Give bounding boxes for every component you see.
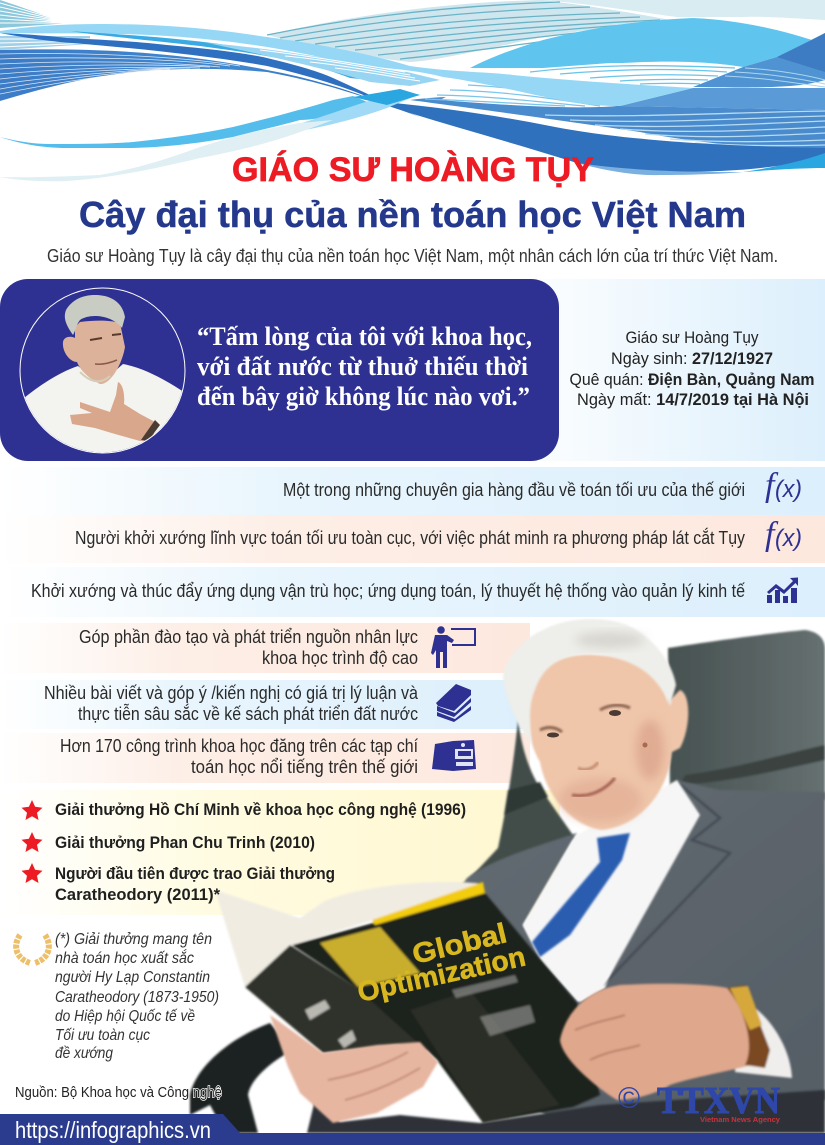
- footnote: đề xướng: [55, 1045, 113, 1062]
- quote text: với đất nước từ thuở thiếu thời: [197, 352, 528, 381]
- icon: open journal: [432, 740, 476, 771]
- footer url: https://infographics.vn: [15, 1117, 211, 1143]
- band: global optimisation: Người khởi xướng lĩnh vực toán tối ưu toàn cục, với việc phát minh ra phương pháp lát cắt Tụy: [75, 527, 745, 548]
- icon: laurel: [16, 935, 49, 963]
- band: operations research: Khởi xướng và thúc đẩy ứng dụng vận trù học; ứng dụng toán, lý thuyết hệ thống vào quản lý kinh tế: [31, 581, 745, 601]
- band: expert: Một trong những chuyên gia hàng đầu về toán tối ưu của thế giới: [283, 480, 745, 500]
- shirt: [523, 780, 700, 1002]
- agency logo: [618, 1080, 780, 1124]
- band: writing: Nhiều bài viết và góp ý /kiến nghị có giá trị lý luận và: [44, 683, 419, 703]
- bio name: Giáo sư Hoàng Tụy: [626, 328, 759, 347]
- tagline: Vietnam News Agency: [700, 1117, 780, 1124]
- footnote: do Hiệp hội Quốc tế về: [55, 1008, 195, 1025]
- book title text: Global: [409, 917, 510, 970]
- icon: f(x) second: f: [765, 516, 779, 553]
- large photo of professor with book: [190, 619, 825, 1133]
- award 3: [22, 863, 335, 904]
- header wave graphic: [0, 0, 825, 181]
- band: global optimisation: [0, 515, 825, 563]
- award 2: Giải thưởng Phan Chu Trinh (2010): [55, 834, 315, 852]
- quote text: đến bây giờ không lúc nào vơi.”: [197, 382, 530, 411]
- panel: biography: [500, 279, 825, 461]
- band: writing: [0, 680, 530, 729]
- icon: f(x) second: (x): [775, 525, 802, 552]
- footnote: [55, 931, 219, 1062]
- award 1: Giải thưởng Hồ Chí Minh về khoa học công nghệ (1996): [55, 801, 466, 819]
- head: [503, 619, 688, 830]
- left hand: [270, 1015, 438, 1123]
- band: publications: Hơn 170 công trình khoa học đăng trên các tạp chí: [60, 736, 418, 756]
- footnote: Tối ưu toàn cục: [55, 1027, 150, 1044]
- band: training: khoa học trình độ cao: [262, 648, 418, 668]
- icon: f(x): (x): [775, 476, 802, 503]
- band: training: Góp phần đào tạo và phát triển nguồn nhân lực: [79, 627, 418, 647]
- footnote: Caratheodory (1873-1950): [55, 989, 219, 1006]
- icon: f(x): f: [765, 467, 779, 504]
- source: Nguồn: Bộ Khoa học và Công nghệ: [15, 1084, 222, 1101]
- icon: teacher: [431, 626, 476, 668]
- band: operations research: [0, 567, 825, 617]
- icon: f(x) second: [765, 516, 802, 553]
- lap: [307, 1090, 825, 1133]
- copyright mark: ©: [618, 1082, 640, 1115]
- book: [215, 882, 600, 1123]
- lapel lines: [603, 782, 730, 985]
- tie: [532, 833, 630, 957]
- book title text: Optimization: [355, 941, 528, 1008]
- title: GIÁO SƯ HOÀNG TỤY: [232, 151, 594, 189]
- portrait in circle: [20, 288, 185, 460]
- icon: star second: [22, 832, 42, 852]
- band: training: [0, 623, 530, 673]
- chair arm: [190, 1023, 293, 1133]
- award 3: Người đầu tiên được trao Giải thưởng: [55, 865, 335, 883]
- band: expert: [0, 467, 825, 515]
- right hand and watch: [560, 984, 792, 1100]
- TTXVN wordmark: TTXVN: [657, 1080, 780, 1122]
- contributions list: [0, 467, 825, 783]
- icon: growth chart: [767, 578, 798, 603]
- footnote: nhà toán học xuất sắc: [55, 948, 194, 967]
- suit: [380, 780, 825, 1125]
- award 3: Caratheodory (2011)*: [55, 886, 221, 904]
- subtitle: Cây đại thụ của nền toán học Việt Nam: [79, 194, 746, 235]
- chair: [470, 630, 825, 878]
- footnote: người Hy Lạp Constantin: [55, 969, 210, 986]
- bio home town: Quê quán: Điện Bàn, Quảng Nam: [570, 370, 814, 389]
- quote text: “Tấm lòng của tôi với khoa học,: [197, 322, 532, 351]
- panel: awards background: [0, 790, 560, 915]
- band: publications: toán học nổi tiếng trên thế giới: [191, 757, 418, 777]
- icon: f(x): [765, 467, 802, 504]
- icon: books: [436, 684, 471, 722]
- bio birth date: Ngày sinh: 27/12/1927: [611, 349, 773, 368]
- band: publications: [0, 733, 530, 783]
- quote text: [197, 322, 532, 411]
- footnote: (*) Giải thưởng mang tên: [55, 931, 212, 948]
- bio death date: Ngày mất: 14/7/2019 tại Hà Nội: [577, 390, 809, 409]
- band: writing: thực tiễn sâu sắc về kế sách phát triển đất nước: [78, 703, 418, 724]
- footer bar: [0, 1114, 825, 1145]
- panel: quote: [0, 279, 559, 461]
- panel: awards: [22, 800, 466, 904]
- icon: star third: [22, 863, 42, 883]
- icon: star: [22, 800, 42, 820]
